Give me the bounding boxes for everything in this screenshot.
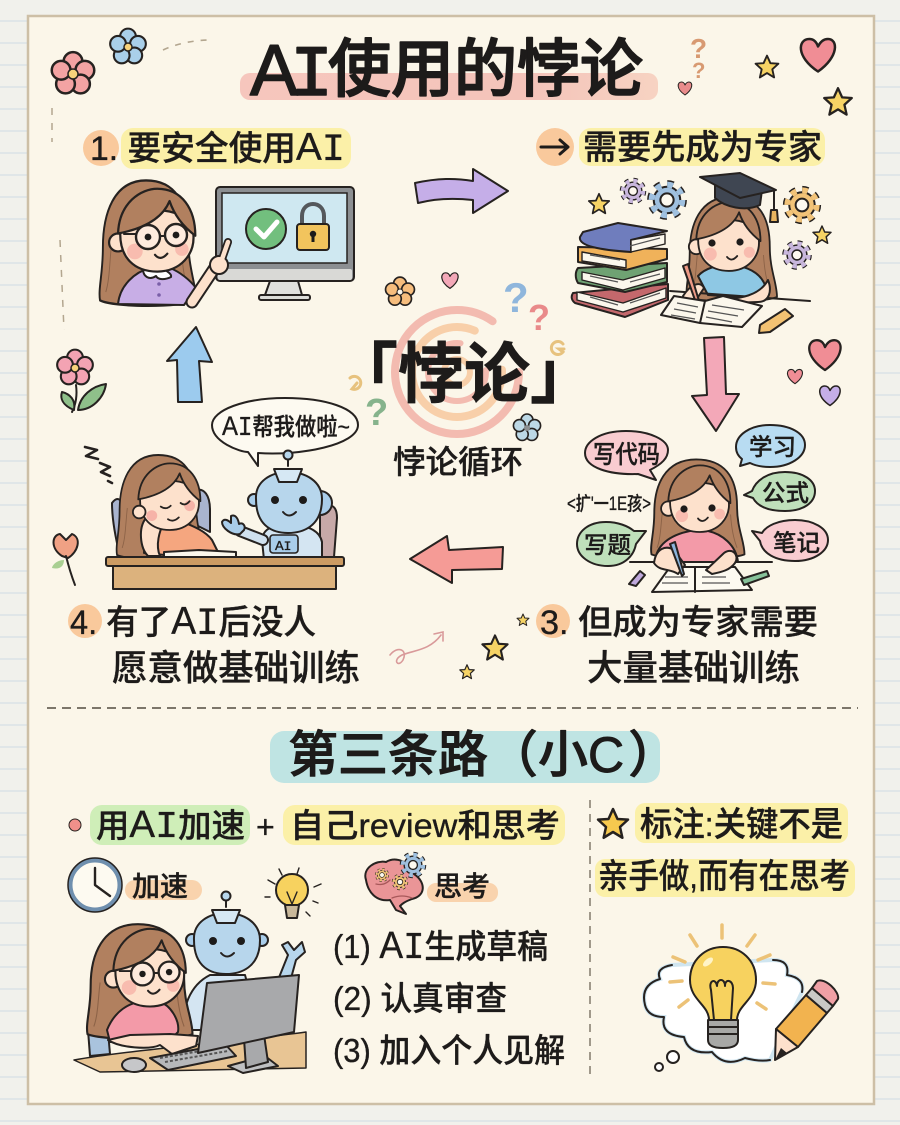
- decoration: small tulip: [52, 534, 78, 585]
- decoration: squiggle and stars: [390, 614, 529, 679]
- illustration: sleeping girl and AI robot at desk: [85, 398, 358, 589]
- keyboard and mouse: [122, 1044, 236, 1072]
- step 1 heading: 1. 要安全使用AI: [90, 126, 345, 172]
- girl: [87, 924, 198, 1056]
- step 2 heading: 需要先成为专家: [583, 129, 822, 167]
- bulb: [690, 947, 756, 1020]
- bubble: 写代码: 写代码: [593, 441, 660, 469]
- step 4 text: [68, 600, 360, 688]
- arrow: blue up to step 1: [167, 327, 212, 402]
- title: [240, 31, 658, 117]
- scribbled code: <扩'一1E孩>: [567, 493, 651, 515]
- illustration: girl and robot at computer: [74, 892, 306, 1073]
- pens: [629, 571, 645, 586]
- center words: 「悖论」: [332, 337, 596, 411]
- rays: [670, 925, 775, 1009]
- robot: [222, 450, 332, 560]
- spiral rings: [395, 310, 519, 434]
- formula row: [69, 804, 565, 849]
- formula row: 用AI加速: [96, 804, 245, 849]
- monitor: [216, 187, 354, 300]
- center decorations: [350, 273, 564, 440]
- bubble: 公式: 公式: [762, 480, 809, 506]
- decoration: top-right hearts and stars: ?: [690, 33, 707, 64]
- lightbulb small: [265, 868, 321, 918]
- bubble: 写题: [577, 522, 646, 566]
- vertical divider: [589, 800, 591, 1080]
- section divider: [47, 707, 858, 709]
- bubble: 学习: 学习: [749, 434, 796, 460]
- arrow: coral to step 4: [410, 536, 503, 583]
- pencil: [776, 995, 827, 1047]
- thinking steps: (2) 认真审查: [333, 980, 507, 1017]
- chair behind robot: [320, 506, 337, 557]
- gears and stars: [589, 181, 831, 266]
- illustration: student with graduation cap and books: [572, 173, 831, 333]
- pencil: [759, 309, 793, 333]
- decoration: left flower with leaves: [57, 350, 106, 412]
- girl asleep: [112, 455, 236, 560]
- title: A: [250, 31, 298, 111]
- speech bubble: [212, 398, 358, 466]
- note callout: [595, 803, 855, 897]
- center: paradox spiral: 悖论循环: [393, 444, 523, 480]
- decoration: left margin dashes: [52, 108, 64, 330]
- desk: [74, 1032, 306, 1072]
- thinking steps: [333, 925, 565, 1069]
- acceleration label with clock: 加速: [132, 871, 188, 902]
- desk: [106, 557, 344, 589]
- cloud: [644, 960, 802, 1062]
- bubble: 写题: 写题: [584, 532, 631, 558]
- girl with cap: [670, 173, 810, 303]
- center: paradox spiral: [332, 273, 596, 480]
- center decorations: ?: [503, 274, 529, 321]
- thinking label with brain: [365, 855, 498, 914]
- formula row: 自己review和思考: [290, 807, 560, 844]
- section heading: third path: 第三条路（小C）: [288, 727, 678, 783]
- center decorations: ?: [528, 297, 550, 338]
- center decorations: ?: [365, 392, 388, 434]
- bubble: 笔记: [752, 520, 828, 561]
- decoration: right hearts: [787, 340, 841, 406]
- robot: AI: [275, 538, 291, 554]
- open book: [661, 296, 762, 327]
- thinking label with brain: 思考: [434, 871, 490, 902]
- illustration: girl pointing at secure monitor: [100, 180, 354, 306]
- thinking steps: (1) AI生成草稿: [333, 925, 548, 970]
- decoration: top-right hearts and stars: [678, 33, 852, 115]
- step 3 text: 3. 但成为专家需要: [540, 604, 818, 642]
- step 3 text: [536, 604, 818, 688]
- bubble: 公式: [744, 472, 815, 511]
- note callout: 标注:关键不是: [640, 806, 843, 844]
- title: I: [290, 35, 333, 117]
- thinking steps: (3) 加入个人见解: [333, 1032, 565, 1069]
- note callout: 亲手做,而有在思考: [598, 858, 850, 896]
- decoration: top-right hearts and stars: ?: [692, 58, 705, 83]
- arrow: purple to step 2: [415, 169, 508, 213]
- bubble: 笔记: 笔记: [773, 530, 820, 556]
- bubble: 写代码: [585, 431, 668, 480]
- acceleration label with clock: [68, 858, 202, 912]
- stack of books: [572, 223, 668, 317]
- title: 使用的悖论: [328, 35, 643, 105]
- girl with glasses: [100, 180, 228, 306]
- step 3 text: 大量基础训练: [587, 648, 800, 688]
- girl writing: [630, 459, 772, 592]
- speech bubble: AI帮我做啦~: [222, 411, 350, 444]
- arrow: pink to step 3: [692, 337, 739, 431]
- step 4 text: 愿意做基础训练: [112, 648, 360, 688]
- step 4 text: 4. 有了AI后没人: [70, 600, 316, 646]
- formula row: +: [256, 809, 275, 845]
- illustration: thought cloud with lightbulb and pencil: [644, 925, 838, 1071]
- computer monitor: [198, 975, 299, 1073]
- bubble: 学习: [736, 425, 805, 467]
- decoration: top-left flowers: [52, 29, 212, 93]
- illustration: girl surrounded by study tasks: [567, 425, 828, 592]
- robot: [184, 892, 305, 1030]
- zzz: [85, 447, 112, 483]
